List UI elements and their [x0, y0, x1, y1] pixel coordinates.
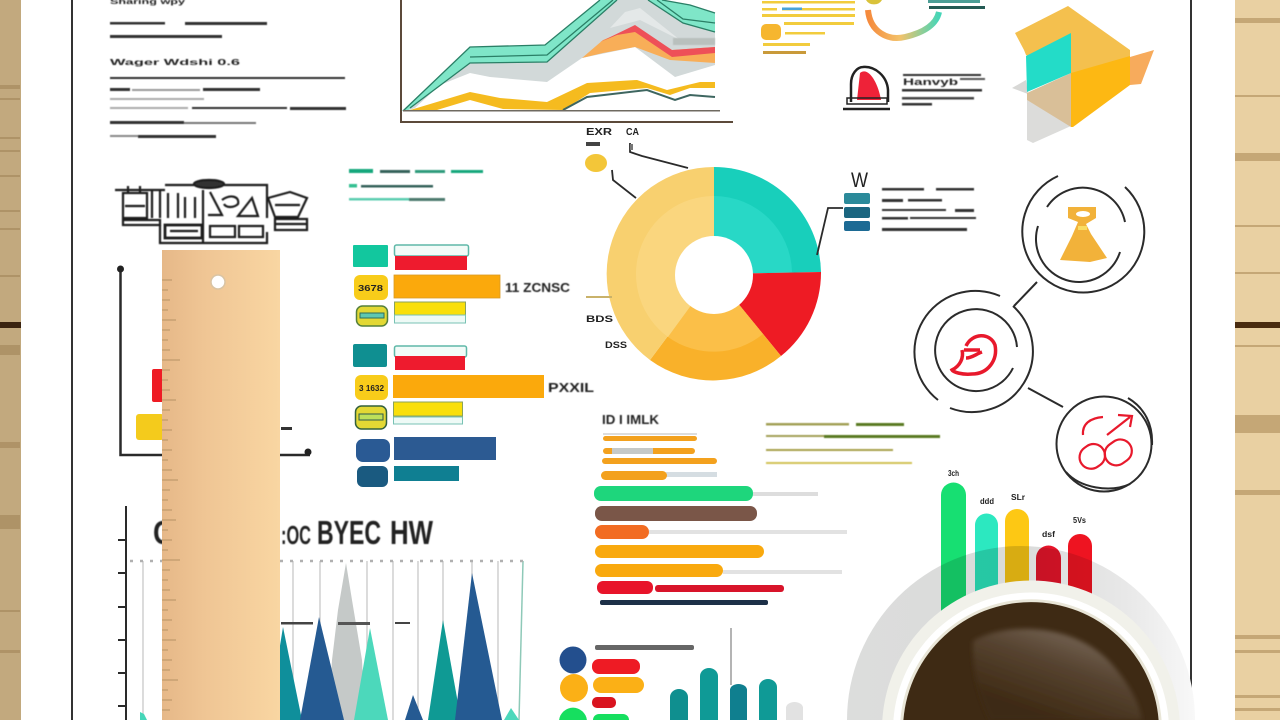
chart heading: HW: [390, 514, 434, 551]
grouped bars 1: 11 ZCNSC: [505, 280, 571, 295]
grouped bars 1: 3678: [358, 284, 384, 293]
coffee saucer: [847, 546, 1195, 720]
concentric circle node: flask: [1022, 176, 1144, 293]
chart heading: [153, 514, 434, 551]
horizontal bars list: [594, 412, 847, 605]
donut label left: [586, 296, 627, 350]
axis chart left: [117, 266, 312, 456]
donut legend right: [844, 169, 976, 231]
grouped bars 2: 3 1632: [359, 384, 385, 393]
triangle chart: [130, 561, 525, 720]
wood right: [1235, 0, 1280, 720]
donut label left: BDS: [586, 314, 613, 324]
donut label top: CA: [626, 127, 639, 138]
small column chart bottom: [670, 628, 803, 720]
olive text lines: [766, 423, 940, 464]
sheet border right: [1190, 0, 1192, 720]
connector line: [1028, 388, 1063, 407]
grouped bars 2: [353, 344, 594, 429]
ruler: [162, 250, 280, 720]
value columns: SLr: [1011, 493, 1025, 502]
donut label left: DSS: [605, 340, 627, 350]
donut legend right: W: [851, 169, 868, 192]
ring diagram: top: [866, 0, 985, 38]
grouped bars 1: [353, 245, 571, 326]
caption: backpack: [902, 74, 985, 106]
circle node: red link: [1056, 396, 1152, 492]
donut label top: [585, 127, 639, 172]
concentric circle node: red symbol: [914, 291, 1033, 412]
value columns: [941, 469, 1092, 620]
green legend text: [349, 169, 483, 201]
caption: backpack: Hanvyb: [903, 77, 959, 87]
chart axis with ticks: [118, 506, 126, 720]
grouped bars 3: [356, 437, 496, 487]
chart heading: C: [153, 514, 173, 551]
value columns: dsf: [1042, 530, 1055, 539]
value columns: 5Vs: [1073, 516, 1087, 525]
text block: top left: [110, 0, 346, 138]
wood left: [0, 0, 21, 720]
donut chart: [607, 167, 821, 380]
pills legend bottom: [559, 645, 694, 720]
horizontal bars list: ID I IMLK: [602, 412, 660, 427]
isometric cube: [1012, 6, 1154, 143]
sheet border left: [71, 0, 73, 720]
yellow legend: top centre: [761, 1, 855, 54]
value columns: ddd: [980, 497, 994, 506]
value columns: 3ch: [948, 469, 959, 478]
donut connectors: [612, 143, 843, 255]
chart heading: :OC: [281, 520, 311, 550]
connector line: [1014, 282, 1037, 306]
chart heading: BYEC: [317, 514, 381, 551]
coffee cup: [882, 580, 1180, 720]
grouped bars 2: PXXIL: [548, 380, 594, 395]
icon: red backpack: [843, 67, 890, 109]
area chart: top centre: [401, 0, 733, 122]
line-art icon: toolbar: [115, 180, 307, 243]
text block: top left: Wager Wdshi 0.6: [110, 58, 241, 67]
donut label top: EXR: [586, 127, 613, 138]
